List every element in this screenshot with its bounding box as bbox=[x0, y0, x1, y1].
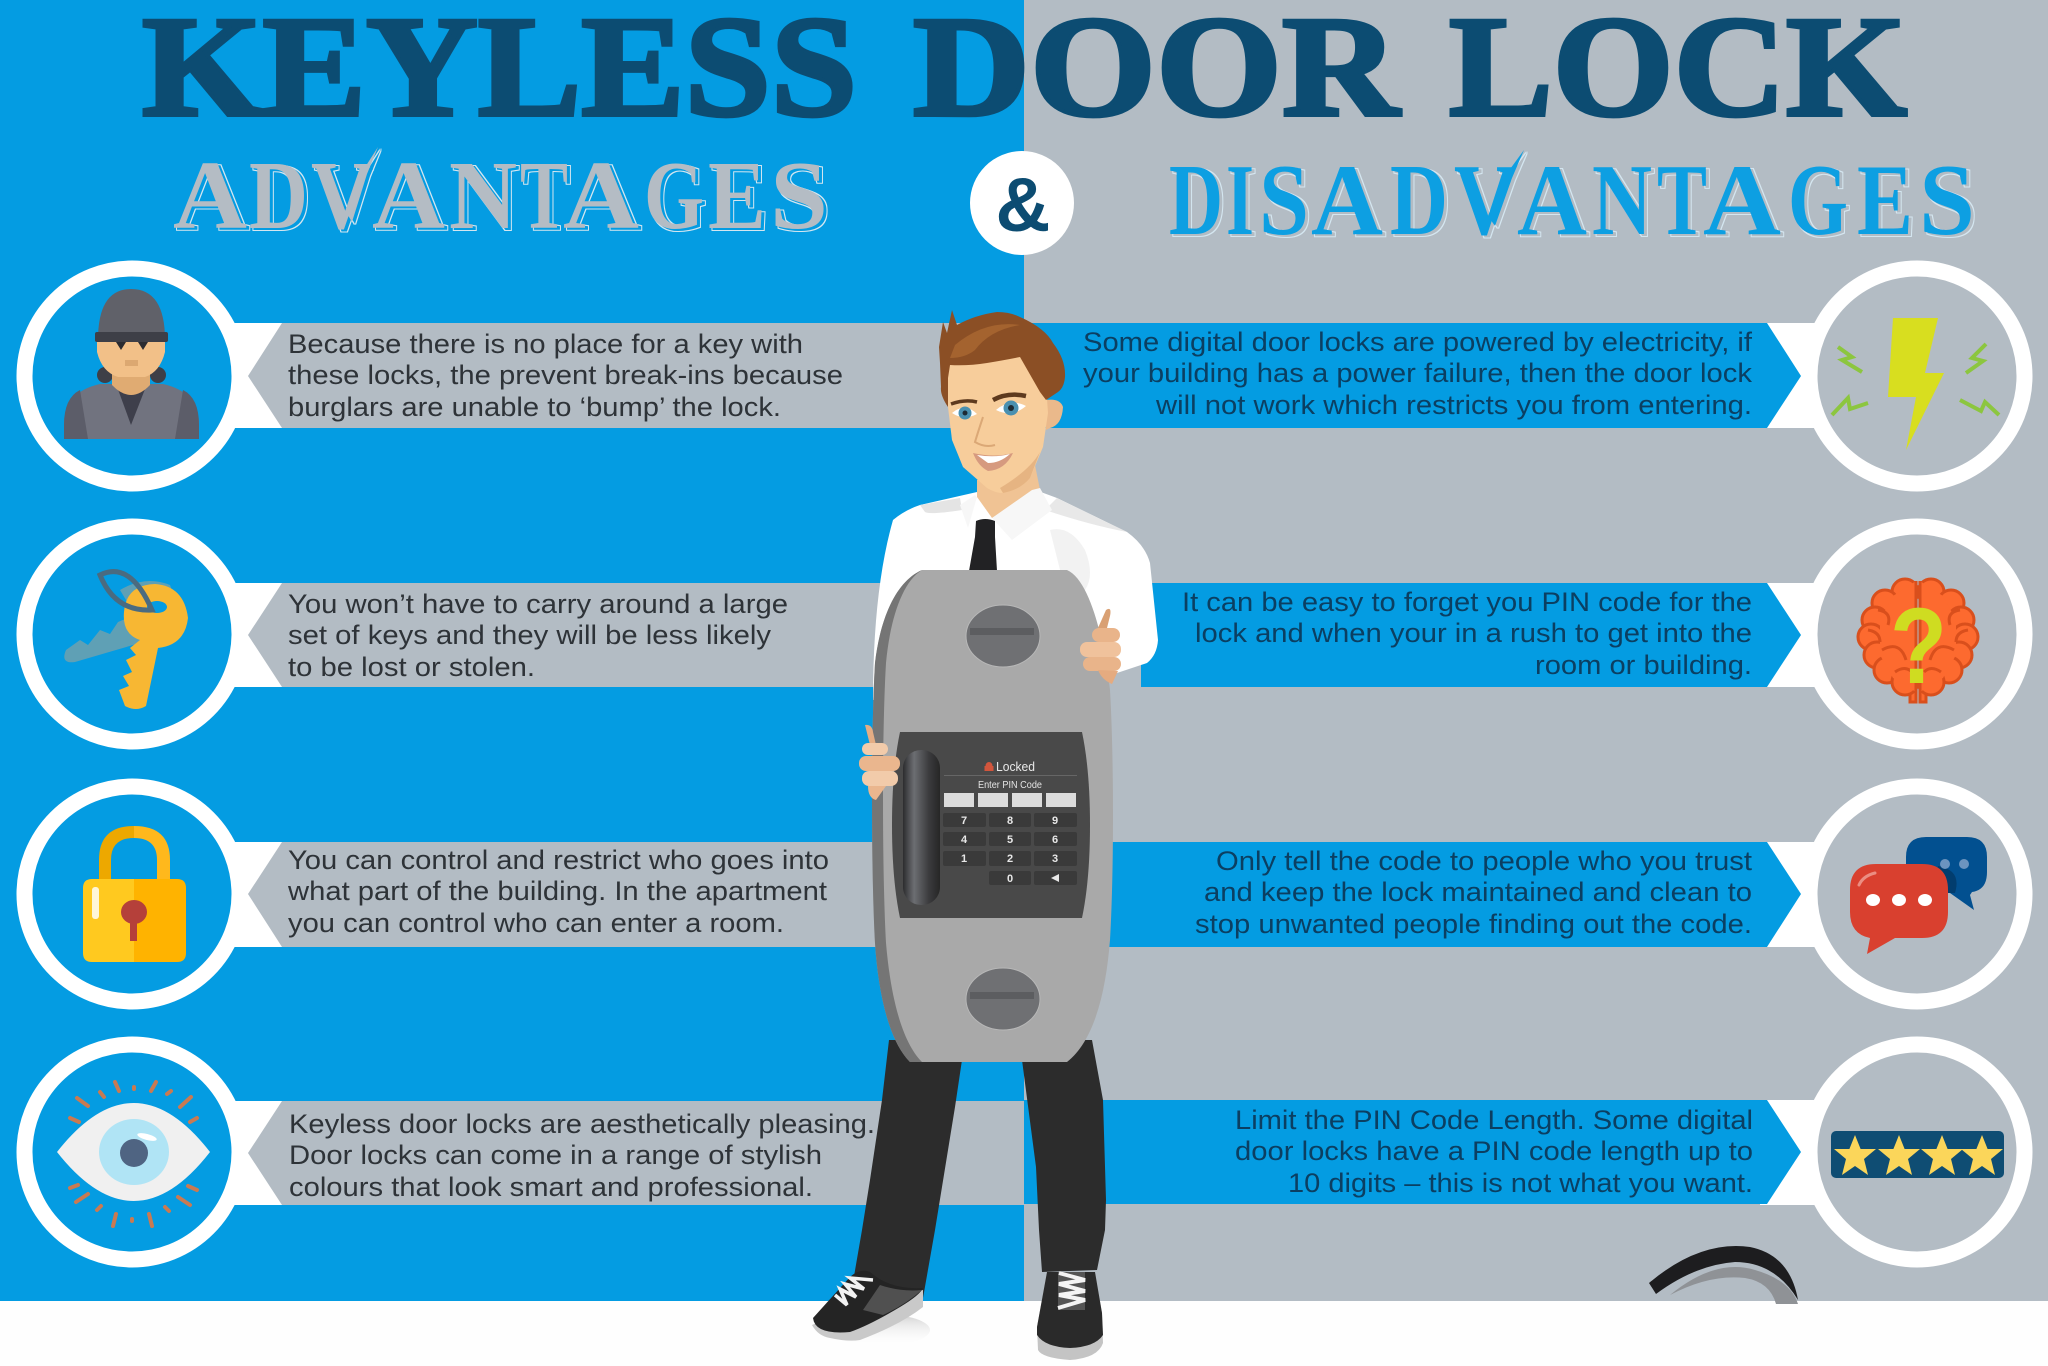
heading: disadvantages: T bbox=[1657, 144, 1707, 257]
disadvantage row 4 bbox=[1024, 1044, 2024, 1260]
keypad buttons: 5 bbox=[1007, 834, 1013, 846]
text: disadvantage 1: will not work which restricts you from entering. bbox=[1155, 390, 1752, 420]
keypad buttons: 1 bbox=[961, 853, 967, 865]
heading: disadvantages: D bbox=[1169, 144, 1223, 257]
head and face bbox=[939, 310, 1065, 493]
icon: padlock bbox=[83, 826, 186, 962]
ampersand badge bbox=[970, 151, 1074, 255]
heading: advantages: A bbox=[563, 142, 639, 250]
tie bbox=[969, 519, 997, 571]
keypad buttons: 6 bbox=[1052, 834, 1058, 846]
text: disadvantage 3 bbox=[1195, 846, 1753, 939]
disadvantage row 2 bbox=[1141, 526, 2024, 742]
handle bbox=[903, 750, 940, 905]
heading: disadvantages: V bbox=[1454, 144, 1514, 257]
heading: disadvantages: A bbox=[1311, 144, 1383, 257]
heading: advantages: E bbox=[708, 142, 766, 250]
text: disadvantage 2: room or building. bbox=[1535, 650, 1752, 680]
text: advantage 4 bbox=[289, 1109, 875, 1202]
heading: advantages: D bbox=[249, 142, 308, 250]
keypad buttons: 4 bbox=[961, 834, 968, 846]
disadvantage row 1 bbox=[1024, 268, 2024, 484]
right shoe bbox=[1037, 1272, 1103, 1360]
text: advantage 1: burglars are unable to ‘bump’ the lock. bbox=[288, 392, 781, 422]
text: disadvantage 2 bbox=[1182, 587, 1752, 680]
heading: advantages: V bbox=[311, 142, 371, 250]
icon: keys bbox=[64, 572, 188, 709]
heading: advantages: T bbox=[520, 142, 568, 250]
text: advantage 2: You won’t have to carry around a large bbox=[288, 589, 788, 619]
text: advantage 1 bbox=[288, 329, 843, 422]
heading: advantages: N bbox=[449, 142, 517, 250]
heading: disadvantages: D bbox=[1390, 144, 1448, 257]
heading: advantages: A bbox=[173, 142, 247, 250]
text: advantage 3 bbox=[287, 845, 829, 938]
left shoe bbox=[812, 1271, 923, 1341]
text: disadvantage 3: Only tell the code to people who you trust bbox=[1216, 846, 1753, 876]
text: advantage 3: you can control who can enter a room. bbox=[288, 908, 784, 938]
legs and trousers bbox=[853, 1040, 1106, 1298]
text: disadvantage 4: door locks have a PIN code length up to bbox=[1235, 1136, 1753, 1166]
right hand bbox=[1080, 609, 1121, 684]
top oval bolt bbox=[966, 605, 1040, 667]
text: disadvantage 1: Some digital door locks are powered by electricity, if bbox=[1083, 327, 1753, 357]
text: disadvantage 3: stop unwanted people finding out the code. bbox=[1195, 909, 1752, 939]
heading: disadvantages: N bbox=[1592, 144, 1652, 257]
text: advantage 2: set of keys and they will be less likely bbox=[288, 620, 772, 650]
heading: disadvantages: S bbox=[1259, 144, 1309, 257]
text: disadvantage 4: 10 digits – this is not what you want. bbox=[1288, 1168, 1753, 1198]
advantage row 2 bbox=[24, 526, 1024, 742]
keypad buttons: 9 bbox=[1052, 815, 1058, 827]
text: advantage 1: these locks, the prevent break-ins because bbox=[288, 360, 843, 390]
background: blue left panel bbox=[0, 0, 1024, 1301]
icon: brain with question mark: ? bbox=[1890, 585, 1947, 706]
text: advantage 2: to be lost or stolen. bbox=[288, 652, 535, 682]
bottom oval bolt bbox=[966, 968, 1040, 1030]
advantage row 4 bbox=[24, 1044, 1024, 1260]
heading: advantages bbox=[173, 142, 828, 250]
disadvantage row 3 bbox=[1024, 786, 2024, 1002]
lock device bbox=[859, 570, 1121, 1062]
PIN label: Enter PIN Code bbox=[978, 780, 1042, 791]
logo swoosh bbox=[1649, 1246, 1798, 1304]
text: advantage 4: Keyless door locks are aesthetically pleasing. bbox=[289, 1109, 875, 1139]
keypad buttons: 7 bbox=[961, 815, 967, 827]
text: advantage 4: Door locks can come in a range of stylish bbox=[289, 1140, 822, 1170]
icon: lightning bolt bbox=[1832, 318, 1999, 450]
background: gray right panel bbox=[1024, 0, 2048, 1301]
heading: disadvantages: E bbox=[1857, 144, 1913, 257]
left hand bbox=[859, 725, 900, 800]
keypad buttons: 3 bbox=[1052, 853, 1058, 865]
advantage row 3 bbox=[24, 786, 1024, 1002]
shirt bbox=[873, 488, 1158, 700]
text: advantage 2 bbox=[288, 589, 788, 682]
text: disadvantage 1 bbox=[1083, 327, 1753, 420]
heading: advantages: A bbox=[372, 142, 445, 250]
shirt collar bbox=[960, 488, 1052, 540]
text: disadvantage 2: It can be easy to forget you PIN code for the bbox=[1182, 587, 1752, 617]
text: disadvantage 4: Limit the PIN Code Length. Some digital bbox=[1235, 1105, 1753, 1135]
keypad buttons: 8 bbox=[1007, 815, 1013, 827]
neck bbox=[977, 465, 1040, 518]
heading: disadvantages bbox=[1169, 144, 1975, 257]
man holding lock bbox=[812, 310, 1158, 1360]
heading: disadvantages: I bbox=[1226, 144, 1254, 257]
title bbox=[142, 0, 1907, 147]
icon: star rating bbox=[1831, 1131, 2004, 1178]
status label: Locked bbox=[996, 759, 1035, 774]
heading: disadvantages: A bbox=[1517, 144, 1587, 257]
text: disadvantage 2: lock and when your in a rush to get into the bbox=[1195, 618, 1752, 648]
text: disadvantage 4 bbox=[1235, 1105, 1753, 1198]
heading: advantages: G bbox=[644, 142, 704, 250]
icon: brain with question mark bbox=[1858, 579, 1978, 706]
ampersand badge: & bbox=[996, 163, 1050, 248]
text: advantage 3: You can control and restrict who goes into bbox=[288, 845, 829, 875]
text: advantage 1: Because there is no place for a key with bbox=[288, 329, 803, 359]
heading: disadvantages: A bbox=[1703, 144, 1781, 257]
icon: burglar bbox=[64, 289, 199, 439]
PIN boxes bbox=[944, 793, 1076, 807]
text: advantage 4: colours that look smart and professional. bbox=[289, 1172, 813, 1202]
icon: speech bubbles bbox=[1850, 837, 1987, 954]
keypad buttons: 0 bbox=[1007, 873, 1013, 885]
heading: disadvantages: G bbox=[1788, 144, 1848, 257]
background: white floor bbox=[0, 1301, 2048, 1366]
text: disadvantage 1: your building has a power failure, then the door lock bbox=[1083, 358, 1753, 388]
keypad buttons bbox=[943, 813, 1077, 885]
text: disadvantage 3: and keep the lock maintained and clean to bbox=[1204, 877, 1752, 907]
heading: advantages: S bbox=[770, 142, 828, 250]
heading: disadvantages: S bbox=[1919, 144, 1975, 257]
advantage row 1 bbox=[24, 268, 1024, 484]
icon: eye bbox=[57, 1082, 210, 1226]
shoe shadow bbox=[830, 1314, 930, 1346]
keypad panel bbox=[892, 732, 1090, 918]
keypad buttons: 2 bbox=[1007, 853, 1013, 865]
text: advantage 3: what part of the building. In the apartment bbox=[287, 876, 828, 906]
